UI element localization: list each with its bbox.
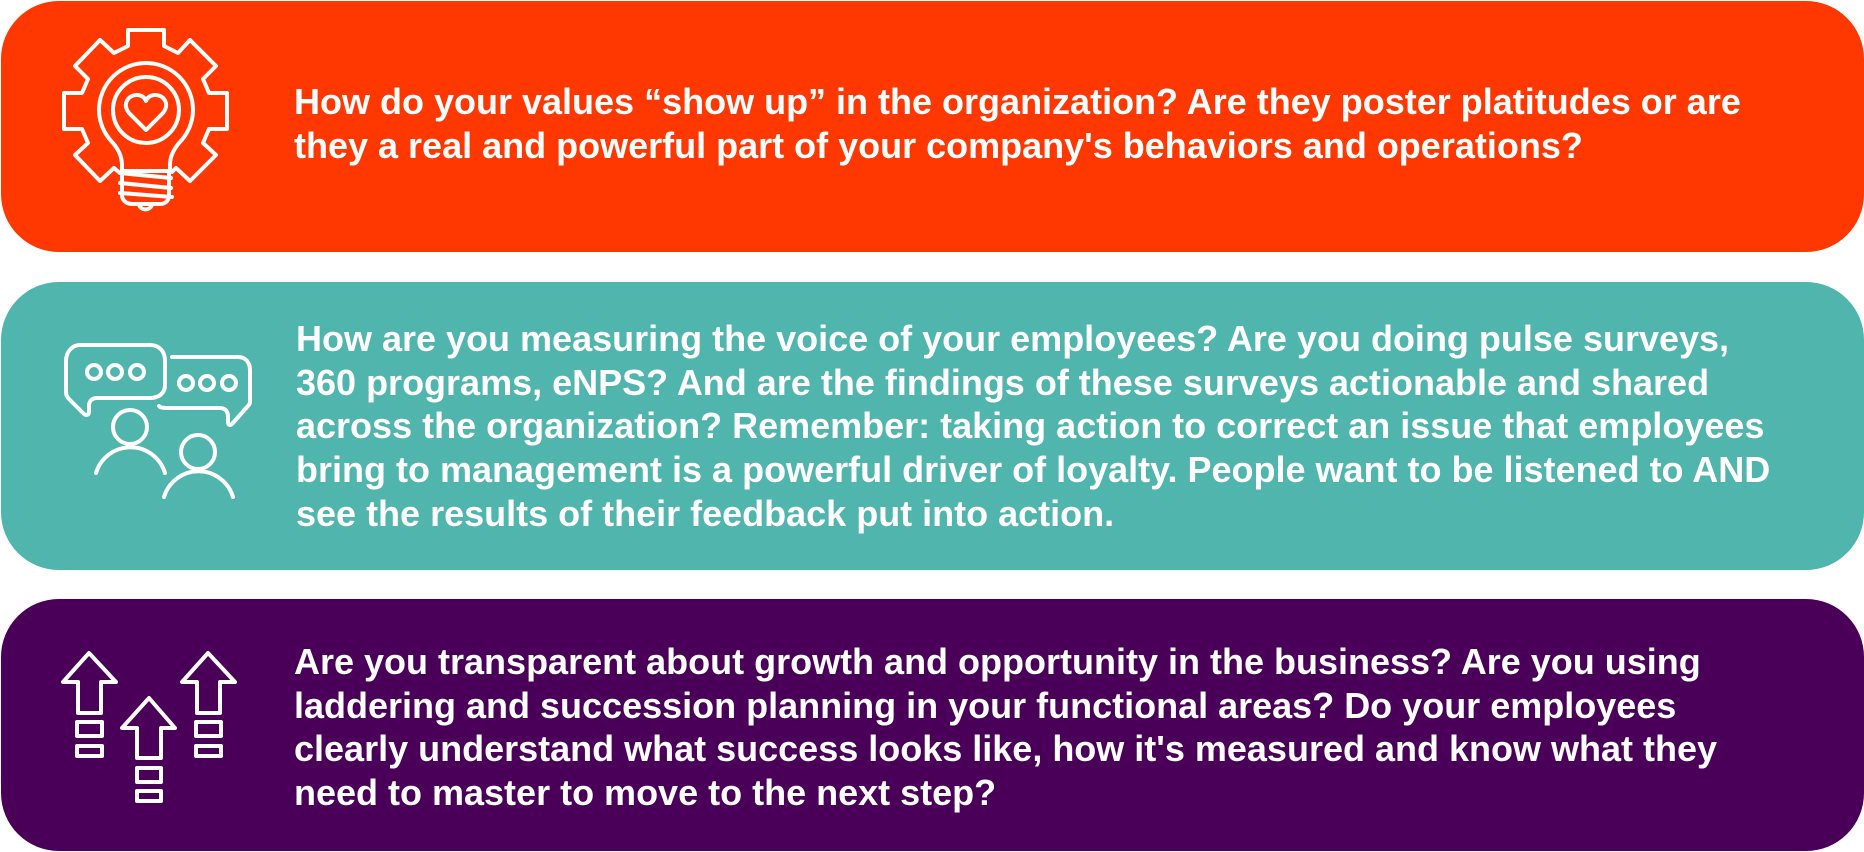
panel: growth and opportunity [1,599,1864,851]
text: values question: they a real and powerful part of your company's behaviors and operations? [294,125,1583,166]
text: growth question: need to master to move to the next step? [294,772,996,813]
panel: values [1,1,1864,252]
text: employee voice question: across the organization? Remember: taking action to correct an issue that employees [296,405,1764,446]
icon: two people with speech bubbles [64,343,252,499]
text: employee voice question [296,318,1770,534]
text: values question [294,81,1741,166]
text: growth question [294,641,1717,813]
panel: employee voice [1,282,1864,570]
text: values question: How do your values “show up” in the organization? Are they poster platitudes or are [294,81,1741,122]
icon: three up arrows with steps [60,650,237,803]
text: employee voice question: How are you measuring the voice of your employees? Are you doing pulse surveys, [296,318,1729,359]
text: growth question: clearly understand what success looks like, how it's measured and know what they [294,728,1717,769]
text: employee voice question: see the results of their feedback put into action. [296,493,1114,534]
text: growth question: laddering and succession planning in your functional areas? Do your employees [294,685,1676,726]
text: employee voice question: bring to management is a powerful driver of loyalty. People want to be listened to AND [296,449,1770,490]
text: employee voice question: 360 programs, eNPS? And are the findings of these surveys actionable and shared [296,362,1709,403]
text: growth question: Are you transparent about growth and opportunity in the business? Are you using [294,641,1701,682]
icon: gear with light bulb and heart [62,28,229,212]
